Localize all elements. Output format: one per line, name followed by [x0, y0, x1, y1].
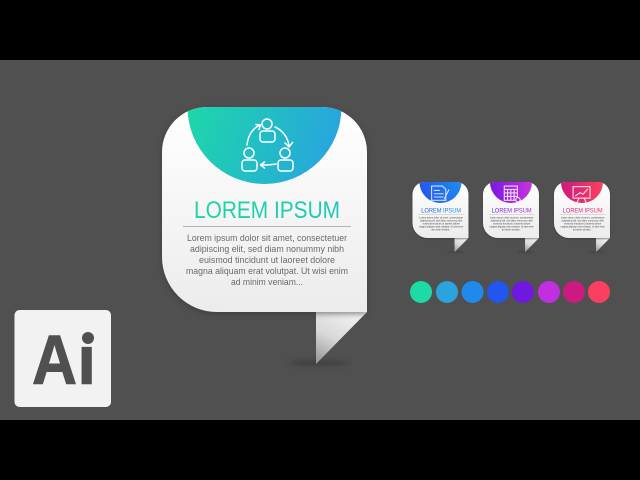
- heading: LOREM IPSUM: [194, 197, 340, 224]
- heading: LOREM IPSUM: [421, 207, 461, 214]
- text: Lorem ipsum dolor sit amet, consectetuer: [419, 216, 463, 220]
- text: euismod tincidunt ut laoreet dolore: [493, 222, 531, 226]
- card shadow: [162, 109, 367, 314]
- header arch: [490, 182, 532, 203]
- body text: euismod tincidunt ut laoreet dolore: [199, 255, 335, 266]
- text: ad minim veniam...: [502, 228, 522, 232]
- text: adipiscing elit, sed diam nonummy nibh: [491, 219, 533, 223]
- badge letter A: A: [32, 321, 77, 399]
- heading: LOREM IPSUM: [563, 207, 603, 214]
- icon: calendar: [504, 186, 520, 202]
- text: [490, 216, 534, 232]
- body text: Lorem ipsum dolor sit amet, consectetuer: [187, 233, 347, 244]
- icon: document and pencil: [432, 186, 449, 200]
- text: Lorem ipsum dolor sit amet, consectetuer: [490, 216, 534, 220]
- badge tile: [14, 310, 111, 407]
- text: euismod tincidunt ut laoreet dolore: [423, 222, 460, 226]
- header arch: [561, 182, 603, 203]
- text: magna aliquam erat volutpat. Ut wisi enim: [419, 225, 463, 229]
- body text: ad minim veniam...: [231, 277, 303, 288]
- text: magna aliquam erat volutpat. Ut wisi enim: [561, 225, 605, 229]
- tail: [596, 238, 610, 252]
- panel: small blue card: [412, 182, 468, 252]
- card body: [162, 107, 367, 312]
- text: ad minim veniam...: [431, 228, 451, 232]
- body text: adipiscing elit, sed diam nonummy nibh: [190, 244, 344, 255]
- rule: [489, 213, 535, 216]
- text: euismod tincidunt ut laoreet dolore: [564, 222, 602, 226]
- teal header arch: [188, 107, 342, 184]
- header arch: [420, 182, 462, 203]
- colour palette swatches: [410, 281, 610, 303]
- text: magna aliquam erat volutpat. Ut wisi enim: [490, 225, 534, 229]
- tail: [525, 238, 539, 252]
- tail shadow: [517, 251, 534, 253]
- round i dot: [82, 332, 94, 344]
- rule: [418, 213, 464, 216]
- text: Lorem ipsum dolor sit amet, consectetuer: [561, 216, 605, 220]
- text: ad minim veniam...: [573, 228, 593, 232]
- heading: LOREM IPSUM: [492, 207, 532, 214]
- card tail fold: [316, 312, 367, 364]
- card shadow: [554, 183, 610, 239]
- rule: [560, 213, 606, 216]
- panel: small purple card: [483, 182, 539, 252]
- heading rule: [183, 226, 351, 227]
- text: [561, 216, 605, 232]
- text: adipiscing elit, sed diam nonummy nibh: [562, 219, 604, 223]
- dot mask: [79, 326, 97, 346]
- body: [554, 182, 610, 238]
- tail shadow: [447, 251, 463, 253]
- tail: [455, 238, 468, 252]
- body text: [186, 233, 348, 288]
- icon: Adobe Illustrator badge: [14, 310, 111, 407]
- icon: three people cycle: [242, 119, 293, 171]
- body text: magna aliquam erat volutpat. Ut wisi enim: [186, 266, 348, 277]
- text: [419, 216, 463, 232]
- panel: main speech card: [162, 107, 367, 366]
- body: [483, 182, 539, 238]
- panel: small pink card: [554, 182, 610, 252]
- tail shadow: [288, 360, 348, 366]
- card shadow: [483, 183, 539, 239]
- card shadow: [412, 183, 468, 239]
- background: [0, 60, 640, 420]
- tail shadow: [588, 251, 605, 253]
- text: adipiscing elit, sed diam nonummy nibh: [420, 219, 463, 223]
- badge letter i: i: [77, 321, 96, 399]
- icon: presentation chart: [573, 187, 590, 202]
- body: [412, 182, 468, 238]
